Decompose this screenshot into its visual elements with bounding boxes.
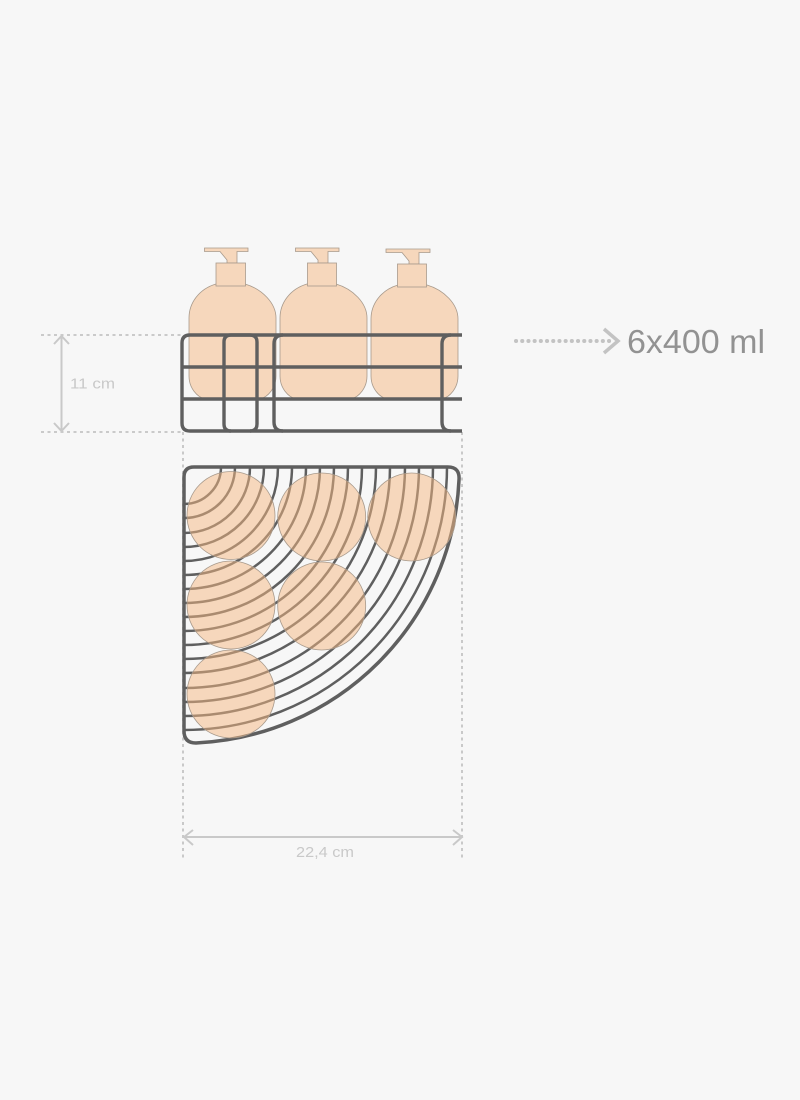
height label: 11 cm xyxy=(70,376,115,392)
height dimension arrow xyxy=(54,336,69,431)
side view: three bottles xyxy=(189,248,458,399)
bottle 3 xyxy=(371,249,458,399)
width label: 22,4 cm xyxy=(296,844,354,861)
width dimension arrow xyxy=(184,830,462,845)
bottle 2 xyxy=(280,248,367,399)
bottle 1 xyxy=(189,248,276,399)
capacity arrow xyxy=(516,329,618,353)
top view: wire basket xyxy=(184,467,459,743)
top view: six bottle circles xyxy=(187,472,456,738)
capacity label: 6x400 ml xyxy=(627,323,765,360)
side view: wire rack xyxy=(182,335,462,431)
